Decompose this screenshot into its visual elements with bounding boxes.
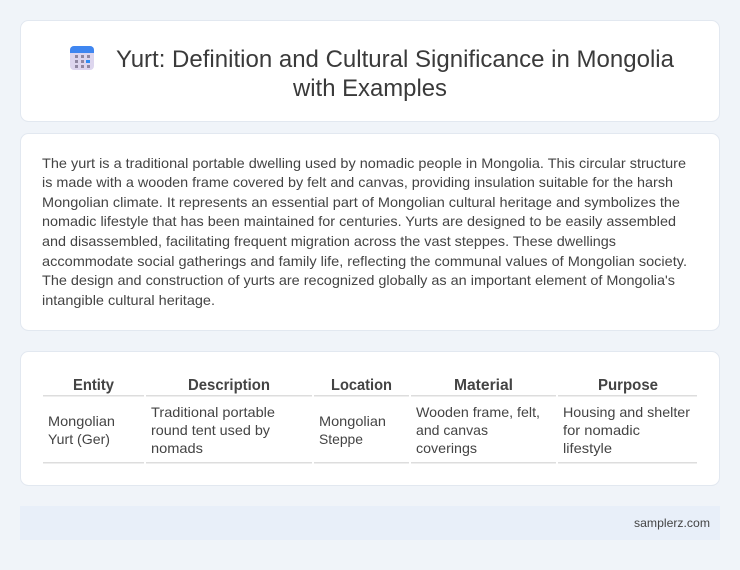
table row: coverings [416,440,477,456]
table header: Material [454,377,513,394]
table row: Yurt (Ger) [48,431,110,447]
icon: calendar [70,46,94,70]
text block: description: is made with a wooden frame covered by felt and canvas, providing insulation suitable for the harsh [42,174,673,190]
table header [73,377,658,394]
table row: Housing and shelter [563,404,690,420]
title: Yurt: Definition and Cultural Significance in Mongolia [116,46,675,73]
table header: Entity [73,377,114,394]
footer [20,506,720,540]
table row: nomads [151,440,203,456]
text block: description: accommodate social gatherings and family life, reflecting the communal values of Mongolian society. [42,253,687,269]
text block: description: The yurt is a traditional portable dwelling used by nomadic people in Mongolia. This circular structure [42,155,686,171]
table header: Location [331,377,392,394]
table row: Mongolian [48,413,115,429]
table row: round tent used by [151,422,270,438]
panel: title card [20,20,720,122]
table row [48,404,690,456]
table header: Purpose [598,377,658,394]
panel: description card [20,134,720,330]
text block: description: The design and construction of yurts are recognized globally as an important element of Mongolia's [42,272,675,288]
title [116,46,675,102]
table row: Traditional portable [151,404,275,420]
table row: and canvas [416,422,488,438]
title: with Examples [292,75,447,102]
footer: samplerz.com [634,516,710,530]
text block: description: nomadic lifestyle that has been maintained for centuries. Yurts are designed to be easily assembled [42,213,676,229]
table row: for nomadic [563,422,640,438]
text block: description: Mongolian climate. It represents an essential part of Mongolian cultural heritage and symbolizes the [42,194,680,210]
text block: description: and disassembled, facilitating frequent migration across the vast steppes. These dwellings [42,233,616,249]
table row: Mongolian [319,413,386,429]
table row: Wooden frame, felt, [416,404,540,420]
text block: description: intangible cultural heritage. [42,292,215,308]
table header: Description [188,377,270,394]
table row: lifestyle [563,440,612,456]
panel: table card [20,352,720,486]
table row: Steppe [319,431,363,447]
text block: description [42,155,687,308]
